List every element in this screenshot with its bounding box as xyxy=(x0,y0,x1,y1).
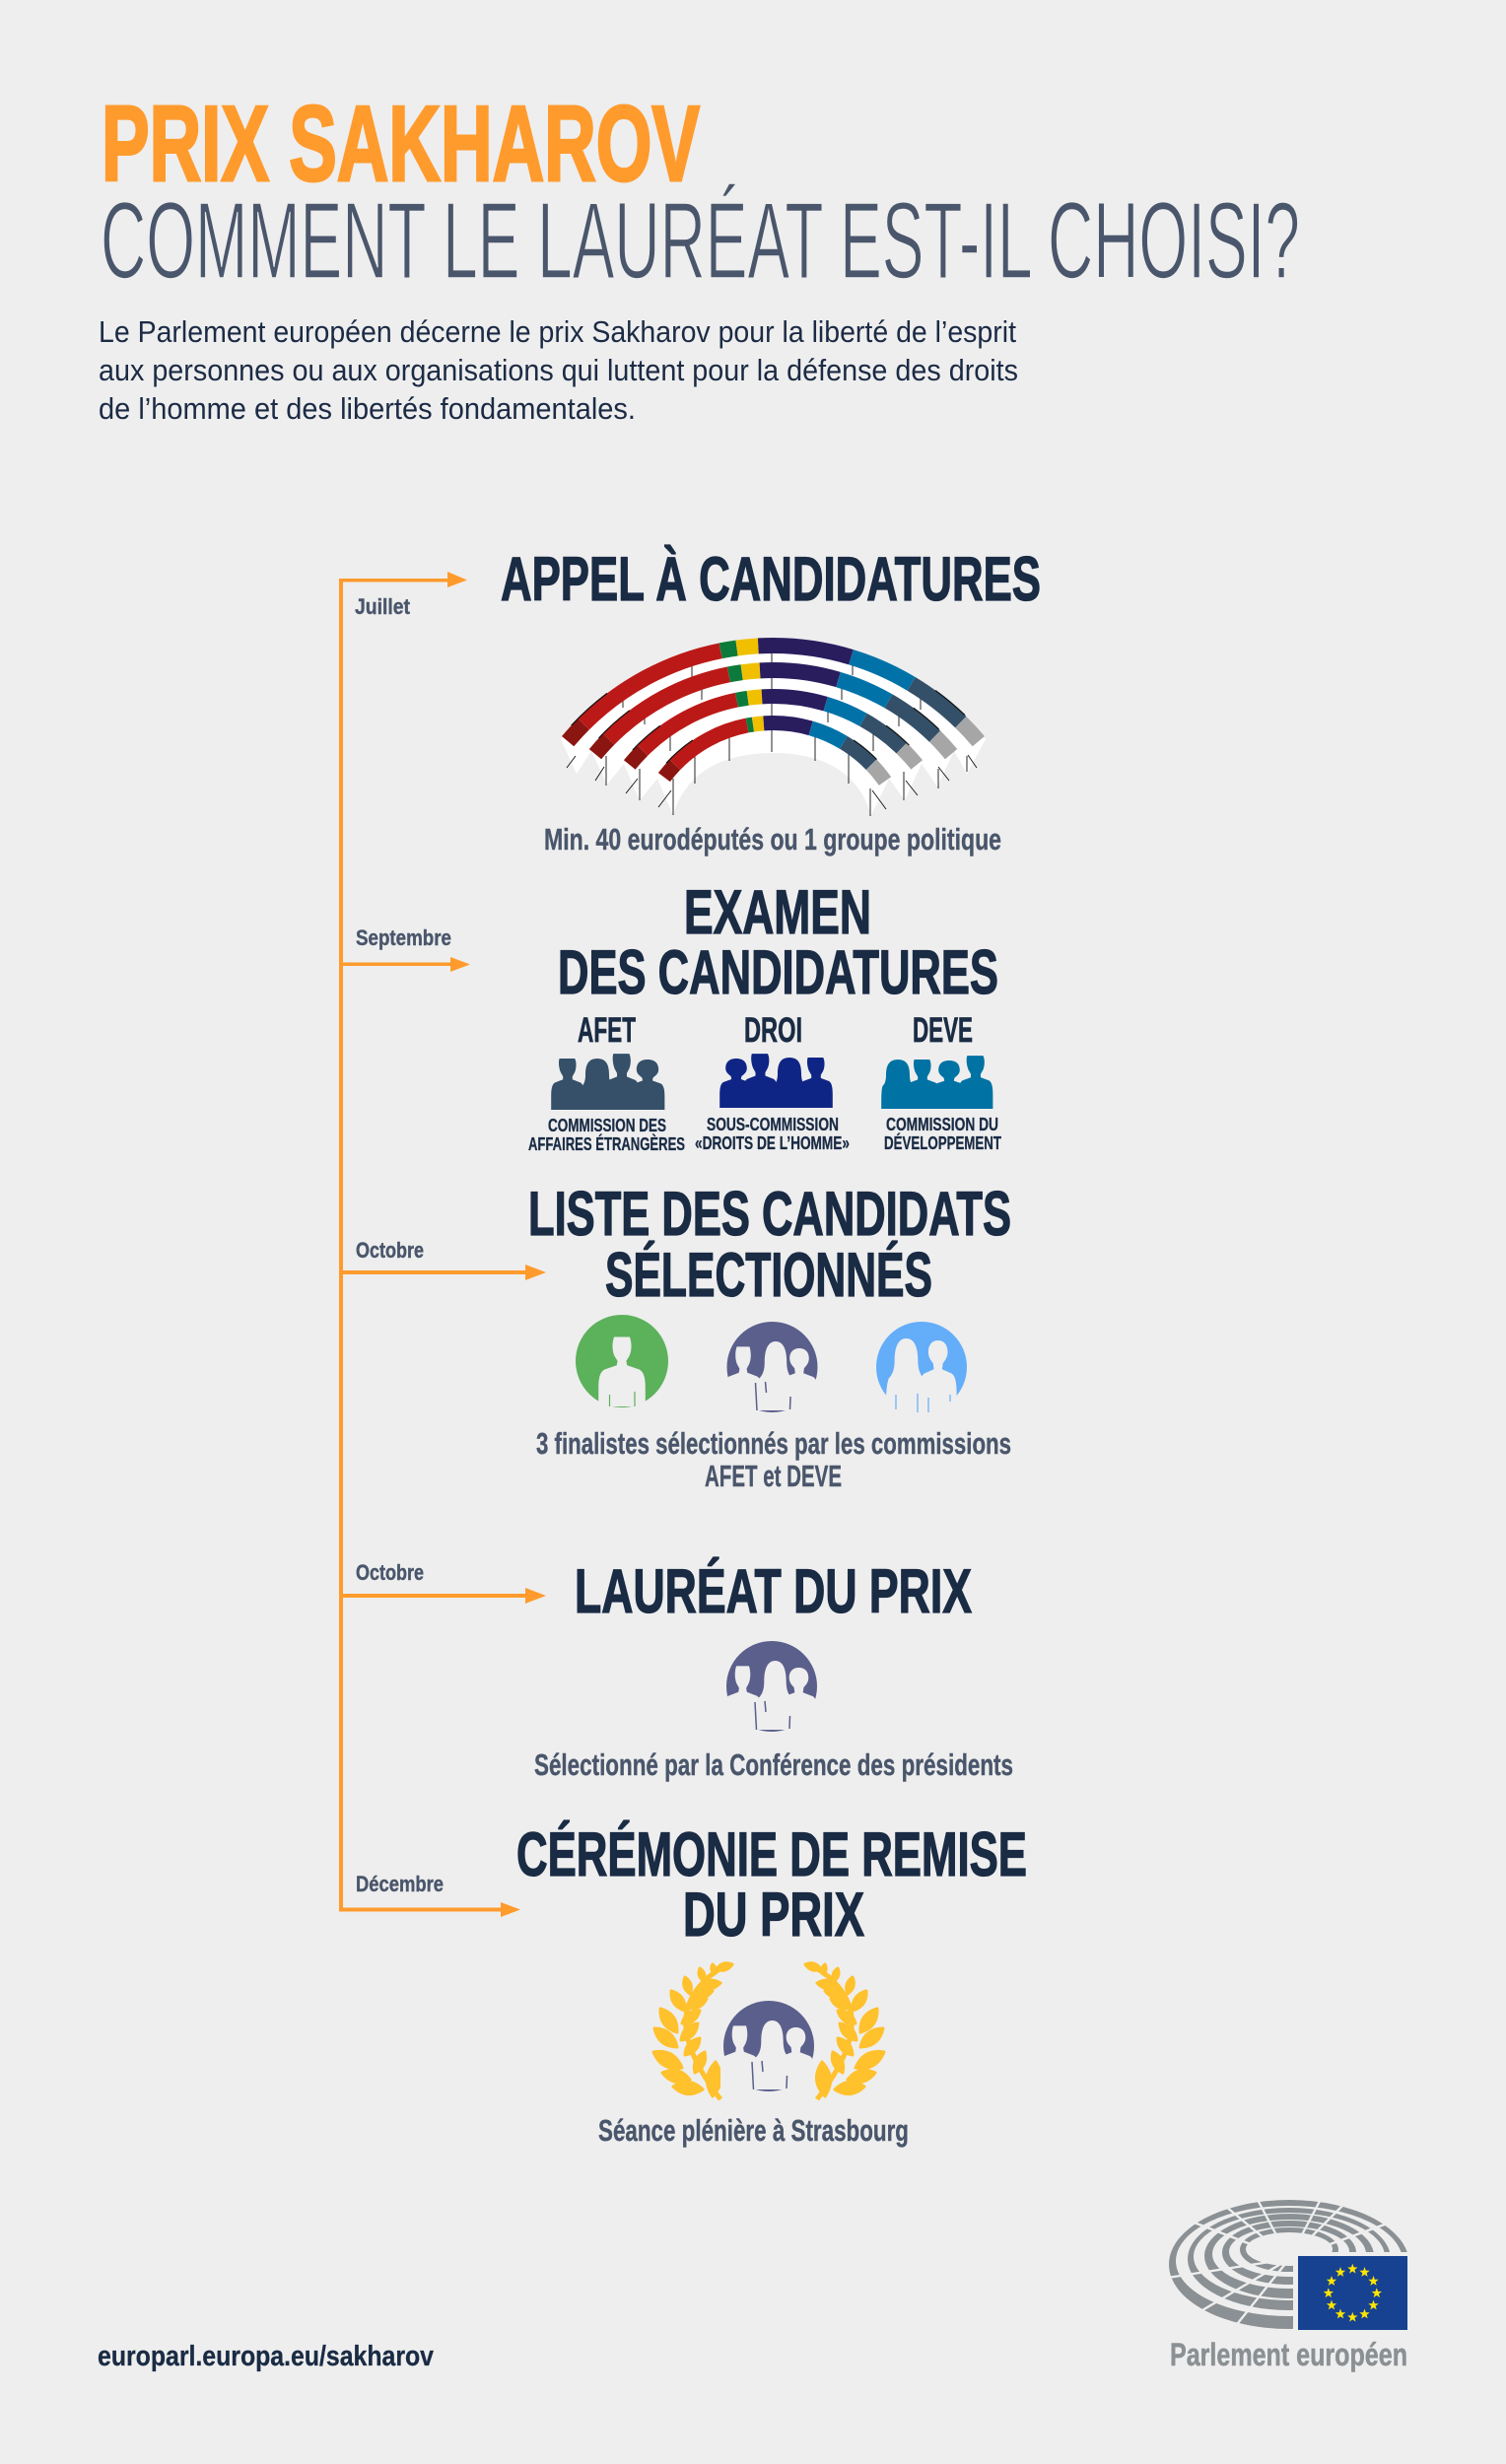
caption: 3 finalistes: AFET et DEVE xyxy=(705,1459,842,1493)
icon: green finalist circle xyxy=(576,1315,668,1407)
heading: cérémonie de remise du prix: DU PRIX xyxy=(683,1881,864,1950)
introduction text xyxy=(99,314,1018,426)
icon: laurel wreath with laureate xyxy=(653,1963,884,2099)
arrow: juillet xyxy=(339,572,467,587)
month: juillet: Juillet xyxy=(355,594,411,619)
heading: liste des candidats sélectionnés: LISTE DES CANDIDATS xyxy=(528,1180,1011,1249)
caption: 3 finalistes xyxy=(536,1426,1011,1493)
logo: parlement européen xyxy=(1161,2185,1416,2372)
committee: deve: DÉVELOPPEMENT xyxy=(884,1132,1001,1153)
icon: afet people group xyxy=(551,1054,664,1110)
icon: blue finalist group xyxy=(876,1322,967,1412)
heading: cérémonie de remise du prix: CÉRÉMONIE DE REMISE xyxy=(516,1820,1027,1889)
caption: 3 finalistes: 3 finalistes sélectionnés par les commissions xyxy=(536,1426,1011,1461)
icon: deve people group xyxy=(881,1056,993,1109)
arrow: septembre xyxy=(341,957,470,972)
committee: droi xyxy=(695,1011,850,1153)
committee: deve xyxy=(881,1011,1001,1153)
chart: hemicycle of political groups xyxy=(383,523,1163,1304)
month: octobre: Octobre xyxy=(356,1560,424,1585)
timeline vertical line xyxy=(339,580,343,1910)
heading: lauréat du prix: LAURÉAT DU PRIX xyxy=(575,1557,972,1626)
month: octobre: Octobre xyxy=(356,1238,424,1263)
caption: séance plénière: Séance plénière à Strasbourg xyxy=(598,2113,909,2148)
heading: examen des candidatures: DES CANDIDATURES xyxy=(558,938,998,1007)
panel: cérémonie de remise du prix xyxy=(516,1820,1027,2148)
icon: droi people group xyxy=(719,1054,833,1108)
committee: deve: DEVE xyxy=(913,1011,973,1050)
heading: liste des candidats sélectionnés: SÉLECTIONNÉS xyxy=(605,1241,932,1310)
timeline with orange arrows xyxy=(339,572,546,1917)
introduction text: de l’homme et des libertés fondamentales. xyxy=(99,391,636,426)
introduction text: Le Parlement européen décerne le prix Sakharov pour la liberté de l’esprit xyxy=(99,314,1016,349)
icon: laureate group xyxy=(723,1641,817,1732)
committee: deve: COMMISSION DU xyxy=(886,1115,998,1134)
arrow: octobre shortlist xyxy=(341,1265,546,1280)
committee: droi: SOUS-COMMISSION xyxy=(707,1115,839,1134)
panel: appel à candidatures xyxy=(383,523,1163,1304)
heading: examen des candidatures: EXAMEN xyxy=(684,878,871,947)
icon: european flag xyxy=(1298,2256,1407,2330)
committee: afet: AFET xyxy=(578,1011,636,1050)
month: septembre: Septembre xyxy=(356,925,451,950)
committee: afet: AFFAIRES ÉTRANGÈRES xyxy=(528,1133,685,1154)
arrow: octobre laureate xyxy=(341,1588,546,1604)
footer url: europarl.europa.eu/sakharov xyxy=(98,2341,434,2372)
icon: purple finalist group xyxy=(724,1322,818,1412)
logo wordmark: Parlement européen xyxy=(1170,2337,1407,2372)
icon: hemicycle xyxy=(1161,2185,1416,2336)
introduction text: aux personnes ou aux organisations qui luttent pour la défense des droits xyxy=(99,353,1018,387)
title: prix sakharov: PRIX SAKHAROV xyxy=(102,84,700,204)
heading: appel à candidatures: APPEL À CANDIDATURES xyxy=(501,545,1041,614)
panel: examen des candidatures xyxy=(528,878,1001,1154)
header: title and introduction xyxy=(99,84,1300,426)
heading: cérémonie de remise du prix xyxy=(516,1820,1027,1950)
committee: droi: «DROITS DE L’HOMME» xyxy=(695,1133,850,1153)
panel: liste des candidats sélectionnés xyxy=(528,1180,1011,1493)
committee: afet xyxy=(528,1011,685,1154)
arrow: décembre xyxy=(339,1902,520,1917)
heading: examen des candidatures xyxy=(558,878,998,1007)
caption: min 40 eurodéputés: Min. 40 eurodéputés ou 1 groupe politique xyxy=(544,822,1001,856)
panel: lauréat du prix xyxy=(534,1557,1013,1782)
committee: droi: DROI xyxy=(744,1011,802,1050)
heading: liste des candidats sélectionnés xyxy=(528,1180,1011,1310)
committee: afet: COMMISSION DES xyxy=(548,1116,666,1135)
month: décembre: Décembre xyxy=(356,1872,444,1896)
caption: conférence des présidents: Sélectionné par la Conférence des présidents xyxy=(534,1747,1013,1782)
